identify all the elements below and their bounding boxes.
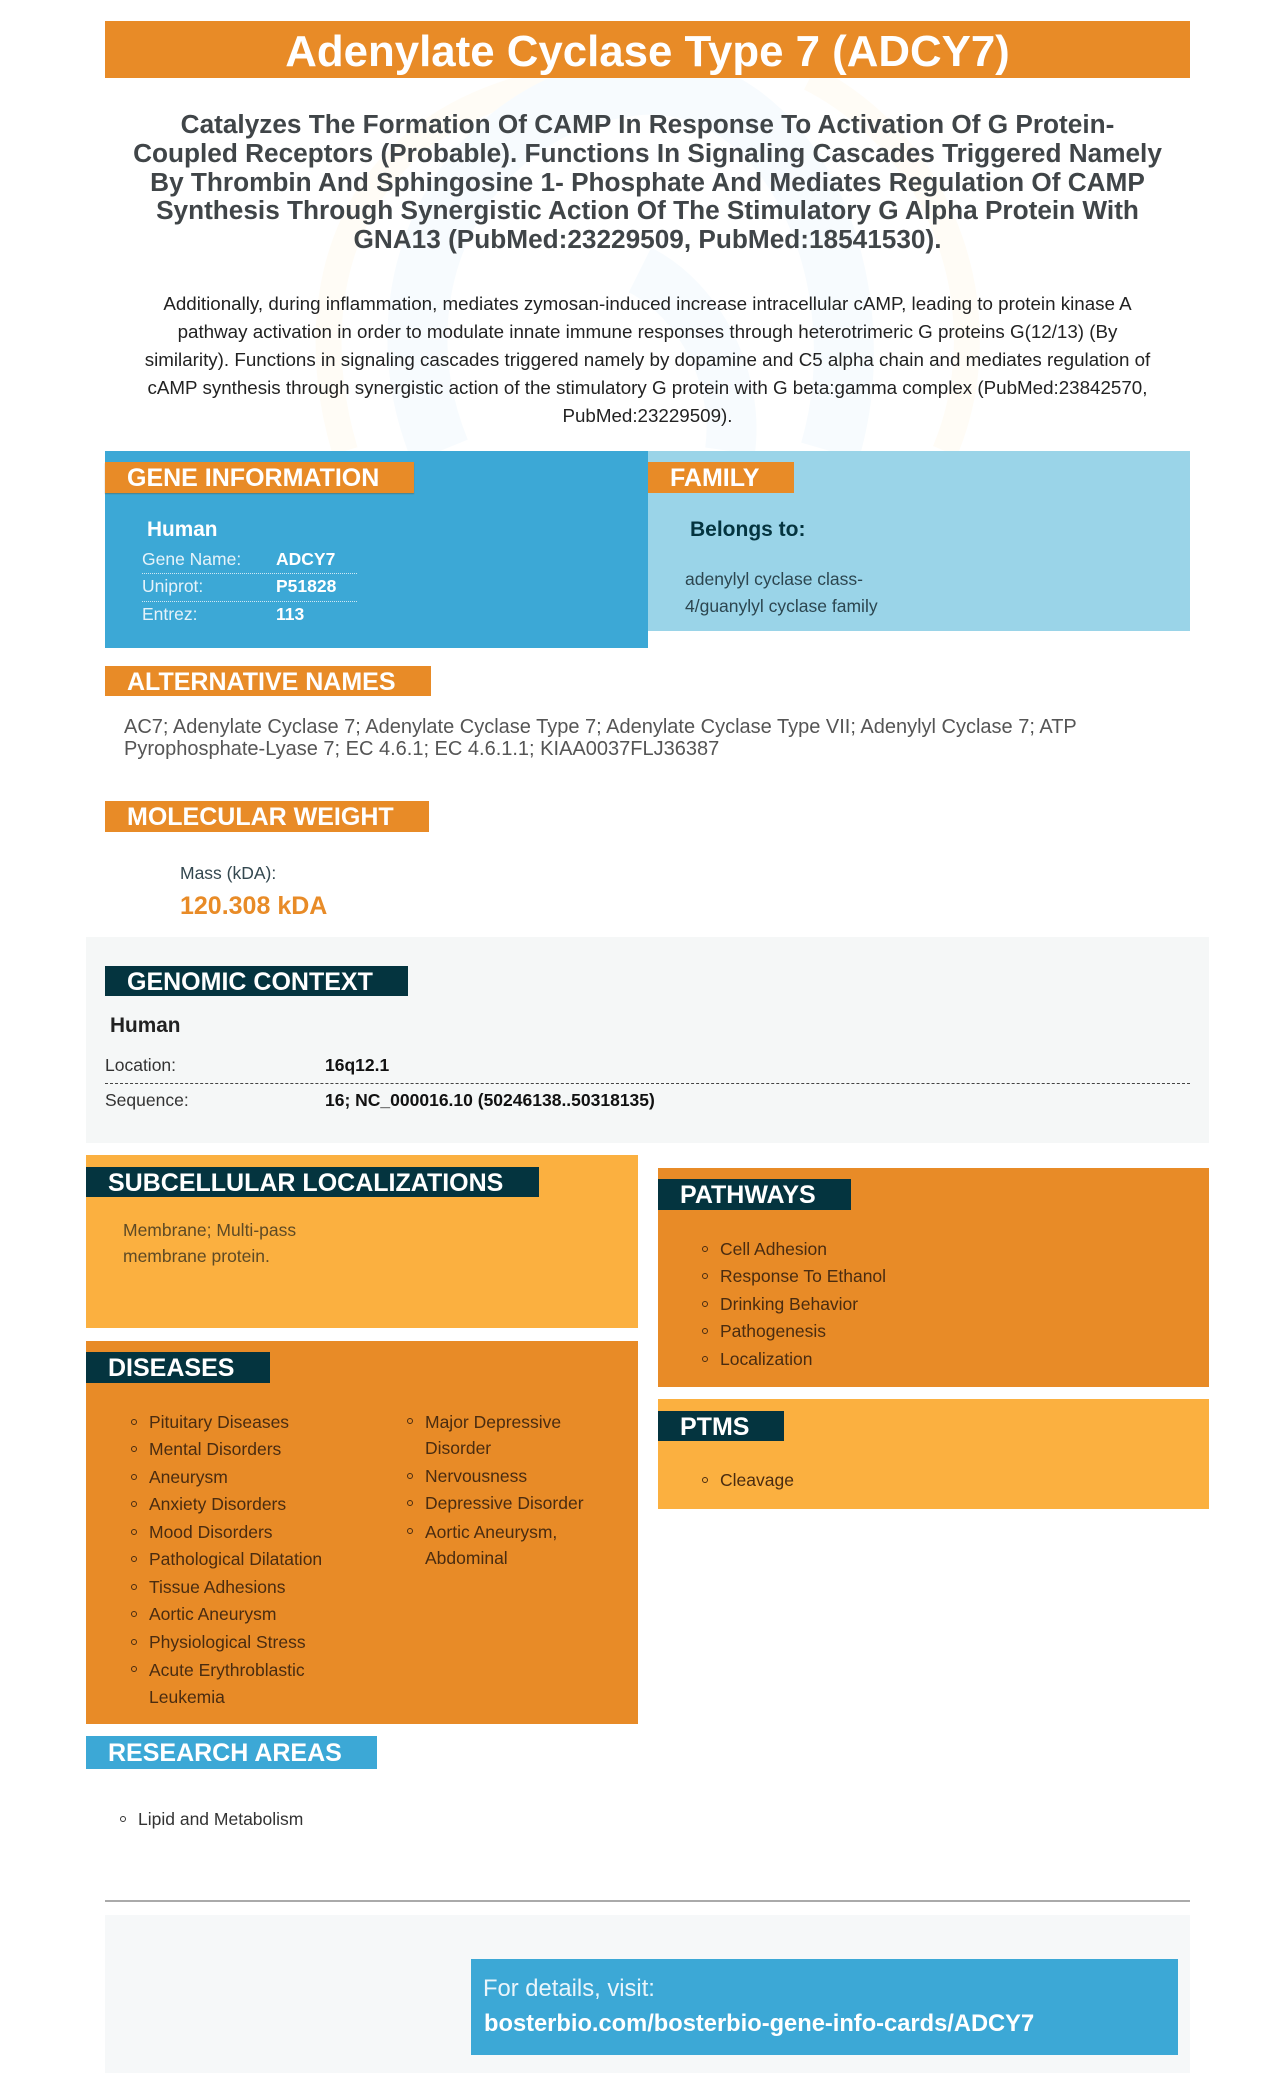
diseases list column 1: Mental Disorders xyxy=(149,1439,281,1459)
title xyxy=(105,21,1190,78)
pathways list: Drinking Behavior xyxy=(720,1294,858,1314)
diseases list column 2: Depressive Disorder xyxy=(425,1493,584,1513)
alternative names text: AC7; Adenylate Cyclase 7; Adenylate Cyclase Type 7; Adenylate Cyclase Type VII; Adenylyl Cyclase 7; ATP xyxy=(124,716,1077,738)
ptms list: Cleavage xyxy=(720,1470,794,1490)
research areas list: Lipid and Metabolism xyxy=(138,1809,303,1829)
pathways list: Response To Ethanol xyxy=(720,1266,886,1286)
diseases list column 2: Aortic Aneurysm, xyxy=(425,1522,557,1542)
pathways list: Cell Adhesion xyxy=(720,1239,827,1259)
gene table: P51828 xyxy=(276,576,336,596)
heading: pathways: PATHWAYS xyxy=(680,1181,816,1209)
diseases list column 1 xyxy=(131,1412,322,1707)
genomic table: Sequence: xyxy=(105,1090,189,1110)
diseases list column 1: Physiological Stress xyxy=(149,1632,306,1652)
heading: research areas xyxy=(86,1736,377,1769)
diseases list column 2: Disorder xyxy=(425,1438,491,1458)
localization text xyxy=(123,1220,296,1266)
panel: gene information xyxy=(105,451,648,648)
heading: gene information: GENE INFORMATION xyxy=(127,464,379,492)
mass label: Mass (kDA): xyxy=(180,863,276,883)
genomic table xyxy=(105,1055,1190,1110)
diseases list column 1: Leukemia xyxy=(149,1687,225,1707)
panel: family xyxy=(648,451,1190,631)
description: similarity). Functions in signaling cascades triggered namely by dopamine and C5 alpha chain and mediates regulation of xyxy=(145,349,1150,370)
mass value: 120.308 kDA xyxy=(180,892,327,920)
heading: molecular weight: MOLECULAR WEIGHT xyxy=(127,803,394,831)
heading: ptms: PTMS xyxy=(680,1413,749,1441)
heading: genomic context: GENOMIC CONTEXT xyxy=(127,968,373,996)
heading: diseases xyxy=(86,1352,270,1383)
diseases list column 1: Anxiety Disorders xyxy=(149,1494,286,1514)
heading: research areas: RESEARCH AREAS xyxy=(108,1739,342,1767)
diseases list column 1: Mood Disorders xyxy=(149,1522,273,1542)
localization text: Membrane; Multi-pass xyxy=(123,1220,296,1240)
heading: family xyxy=(648,462,794,493)
description: Additionally, during inflammation, mediates zymosan-induced increase intracellular cAMP, leading to protein kinase A xyxy=(163,293,1132,314)
subtitle: Catalyzes The Formation Of CAMP In Response To Activation Of G Protein- xyxy=(181,109,1114,139)
gene table xyxy=(142,549,357,624)
heading: alternative names: ALTERNATIVE NAMES xyxy=(127,668,396,696)
family text: adenylyl cyclase class- xyxy=(685,569,863,589)
localization text: membrane protein. xyxy=(123,1246,270,1266)
alternative names text xyxy=(124,716,1077,760)
diseases list column 1: Pathological Dilatation xyxy=(149,1549,322,1569)
diseases list column 1: Tissue Adhesions xyxy=(149,1577,286,1597)
gene table: 113 xyxy=(276,604,304,624)
diseases list column 2: Nervousness xyxy=(425,1466,527,1486)
heading: pathways xyxy=(658,1179,851,1210)
diseases list column 1: Aneurysm xyxy=(149,1467,228,1487)
genomic table: 16q12.1 xyxy=(325,1055,389,1075)
panel: ptms xyxy=(658,1399,1209,1509)
belongs to label: Belongs to: xyxy=(690,518,806,541)
pathways list: Localization xyxy=(720,1349,812,1369)
title: Adenylate Cyclase Type 7 (ADCY7) xyxy=(285,27,1010,76)
pathways list xyxy=(702,1239,886,1369)
description: PubMed:23229509). xyxy=(562,405,733,426)
species label: Human xyxy=(147,518,217,541)
subtitle: By Thrombin And Sphingosine 1- Phosphate And Mediates Regulation Of CAMP xyxy=(150,167,1145,197)
species label: Human xyxy=(110,1014,180,1037)
family text xyxy=(685,569,878,616)
watermark logo xyxy=(316,78,980,451)
description xyxy=(145,293,1150,426)
subtitle: Synthesis Through Synergistic Action Of The Stimulatory G Alpha Protein With xyxy=(156,195,1139,225)
heading: diseases: DISEASES xyxy=(108,1354,234,1382)
panel: subcellular localizations xyxy=(86,1155,638,1328)
diseases list column 2 xyxy=(407,1412,584,1568)
subtitle xyxy=(133,109,1162,254)
description: cAMP synthesis through synergistic action of the stimulatory G protein with G beta:gamma complex (PubMed:23842570, xyxy=(148,377,1147,398)
gene table: Entrez: xyxy=(142,604,197,624)
diseases list column 2: Major Depressive xyxy=(425,1412,561,1432)
diseases list column 1: Aortic Aneurysm xyxy=(149,1604,276,1624)
divider xyxy=(105,1900,1190,1902)
description: pathway activation in order to modulate innate immune responses through heterotrimeric G proteins G(12/13) (By xyxy=(178,321,1117,342)
callout url: bosterbio.com/bosterbio-gene-info-cards/ADCY7 xyxy=(484,2011,1034,2037)
gene table: Gene Name: xyxy=(142,549,241,569)
pathways list: Pathogenesis xyxy=(720,1321,826,1341)
panel: pathways xyxy=(658,1168,1209,1387)
panel: footer xyxy=(105,1915,1190,2073)
callout: details link xyxy=(471,1959,1178,2055)
heading: ptms xyxy=(658,1411,784,1441)
family text: 4/guanylyl cyclase family xyxy=(685,596,878,616)
diseases list column 1: Pituitary Diseases xyxy=(149,1412,289,1432)
panel: diseases xyxy=(86,1341,638,1724)
diseases list column 2: Abdominal xyxy=(425,1548,508,1568)
subtitle: GNA13 (PubMed:23229509, PubMed:18541530). xyxy=(353,224,942,254)
panel: genomic context xyxy=(86,937,1209,1143)
callout label: For details, visit: xyxy=(483,1975,655,2002)
genomic table: Location: xyxy=(105,1055,176,1075)
heading: family: FAMILY xyxy=(670,464,759,492)
gene table: ADCY7 xyxy=(276,549,335,569)
subtitle: Coupled Receptors (Probable). Functions In Signaling Cascades Triggered Namely xyxy=(133,138,1162,168)
heading: subcellular localizations: SUBCELLULAR LOCALIZATIONS xyxy=(108,1169,503,1197)
diseases list column 1: Acute Erythroblastic xyxy=(149,1660,305,1680)
genomic table: 16; NC_000016.10 (50246138..50318135) xyxy=(325,1090,655,1110)
gene table: Uniprot: xyxy=(142,576,203,596)
alternative names text: Pyrophosphate-Lyase 7; EC 4.6.1; EC 4.6.1.1; KIAA0037FLJ36387 xyxy=(124,738,719,760)
